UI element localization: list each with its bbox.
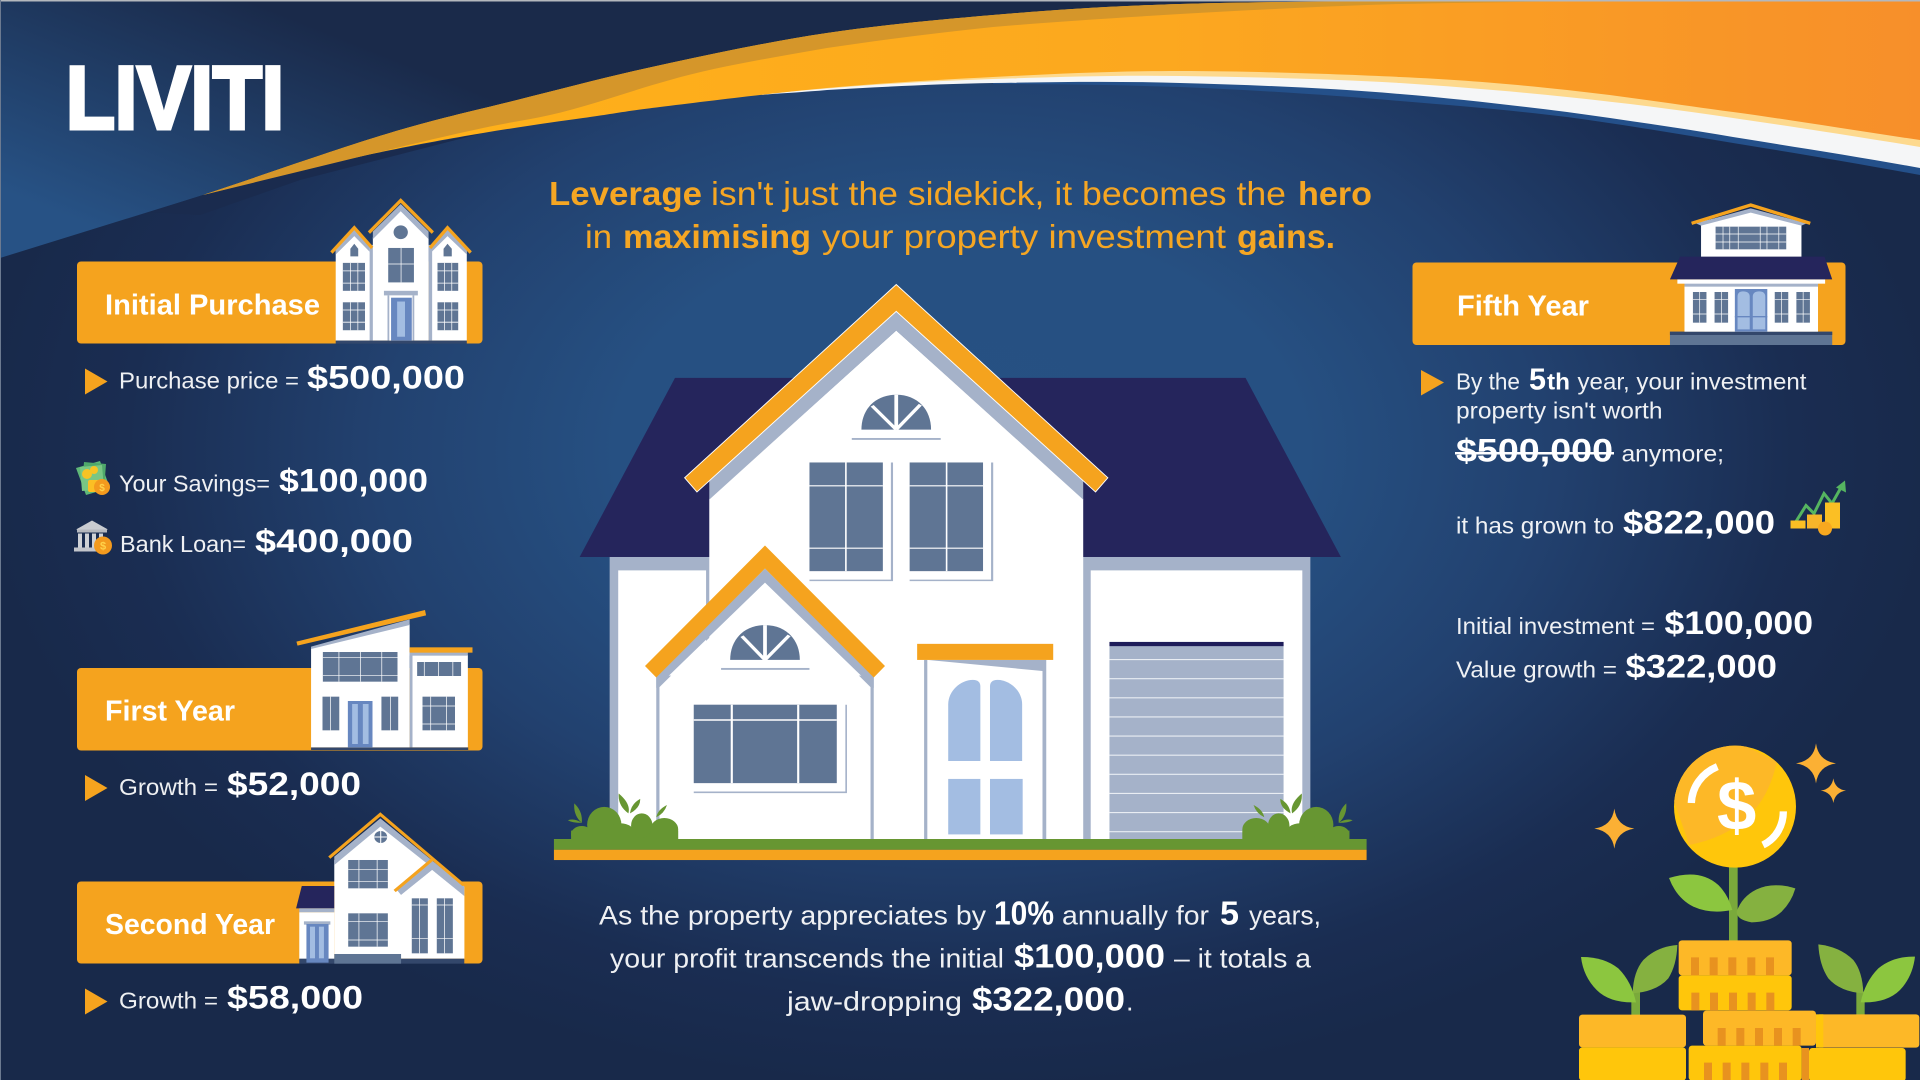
headline: Leverage xyxy=(549,175,702,212)
banner: second year xyxy=(77,882,482,964)
initial investment row: Initial investment = xyxy=(1456,613,1655,639)
headline xyxy=(549,175,1372,255)
icon: savings money: $ xyxy=(99,483,105,494)
panel: initial purchase xyxy=(74,201,482,559)
leaves xyxy=(1581,874,1915,1002)
banner: fifth year xyxy=(1412,262,1846,345)
main gable trim xyxy=(709,311,1083,500)
main gable wall xyxy=(709,330,1083,839)
headline: gains. xyxy=(1237,218,1335,255)
text: grown value xyxy=(1456,504,1775,540)
left bush xyxy=(568,793,678,845)
value growth row xyxy=(1456,648,1777,684)
heading: initial purchase: Initial Purchase xyxy=(105,290,320,322)
headline: in xyxy=(585,218,612,255)
savings row: Your Savings= xyxy=(119,470,270,496)
text: 5th year worth: $500,000 xyxy=(1456,432,1613,468)
text: grown value: $822,000 xyxy=(1623,504,1775,540)
bank loan row: $400,000 xyxy=(255,523,413,559)
text: 5th year worth: year, your investment xyxy=(1578,368,1807,394)
headline: maximising xyxy=(623,218,811,255)
heading: second year: Second Year xyxy=(105,909,275,941)
summary text: annually for xyxy=(1062,900,1209,930)
purchase price row xyxy=(119,360,465,396)
side walls xyxy=(610,557,1310,839)
icon: bank: $ xyxy=(100,540,106,552)
main gable orange roof xyxy=(685,285,1108,492)
banner: initial purchase xyxy=(77,262,482,344)
upper window left xyxy=(809,462,893,581)
summary text: $322,000 xyxy=(972,980,1125,1018)
summary text: years, xyxy=(1249,900,1321,930)
back roof xyxy=(580,378,1341,557)
icon: gabled house with wing xyxy=(296,814,464,964)
summary text: $100,000 xyxy=(1014,938,1165,974)
banner: first year xyxy=(77,668,482,750)
summary text: 5 xyxy=(1220,894,1239,932)
shadow below swoosh tip xyxy=(150,133,483,215)
savings row: $100,000 xyxy=(279,462,428,498)
text: 5th year worth: property isn't worth xyxy=(1456,398,1662,424)
summary text: – it totals a xyxy=(1174,944,1312,974)
icon: modern house xyxy=(296,610,472,750)
coin flower xyxy=(1674,746,1796,868)
growth row year two: $58,000 xyxy=(227,980,363,1016)
heading: fifth year: Fifth Year xyxy=(1457,290,1589,322)
summary text: your profit transcends the initial xyxy=(610,944,1004,974)
top left blue corner xyxy=(0,0,1400,258)
value growth row: Value growth = xyxy=(1456,656,1617,682)
front gable xyxy=(645,546,885,839)
growth row year one: Growth = xyxy=(119,774,218,800)
upper arched window xyxy=(852,395,941,440)
headline: isn't just the sidekick, it becomes the xyxy=(711,175,1286,212)
illustration: money plant with coins xyxy=(1579,737,1919,1080)
panel: fifth year xyxy=(1412,205,1846,684)
icon: bungalow house xyxy=(1670,205,1832,345)
initial investment row xyxy=(1456,605,1813,641)
summary text: jaw-dropping xyxy=(786,986,962,1016)
arrow: growth year one xyxy=(85,775,108,801)
summary text xyxy=(599,894,1321,1018)
text: 5th year worth: th xyxy=(1547,368,1570,394)
text: grown value: it has grown to xyxy=(1456,512,1614,538)
growth row year two: Growth = xyxy=(119,988,218,1014)
text: 5th year worth: By the xyxy=(1456,368,1520,394)
upper window right xyxy=(910,462,993,581)
headline: your property investment xyxy=(822,218,1226,255)
icon: three gabled house xyxy=(331,201,471,344)
icon: savings money xyxy=(76,461,110,495)
front window xyxy=(694,705,847,793)
summary text: As the property appreciates by xyxy=(599,900,987,930)
growth row year two xyxy=(119,980,363,1016)
coin stacks xyxy=(1579,940,1919,1080)
text: 5th year worth xyxy=(1455,362,1807,468)
porch and door xyxy=(917,644,1053,839)
heading: first year: First Year xyxy=(105,696,235,728)
bank loan row: Bank Loan= xyxy=(120,531,246,557)
arrow: fifth year xyxy=(1421,370,1444,396)
stems xyxy=(1631,863,1865,1017)
arrow: purchase price xyxy=(85,368,108,394)
summary text: . xyxy=(1126,986,1134,1016)
illustration: main house xyxy=(554,285,1367,860)
logo: LIVITI xyxy=(66,48,284,148)
value growth row: $322,000 xyxy=(1626,648,1777,684)
panel: second year xyxy=(77,814,482,1016)
purchase price row: Purchase price = xyxy=(119,368,299,394)
bank loan row xyxy=(120,523,413,559)
arrow: growth year two xyxy=(85,988,108,1014)
coin flower: $ xyxy=(1717,766,1756,845)
icon: bank xyxy=(74,520,112,554)
top swoosh xyxy=(203,2,1920,195)
savings row xyxy=(119,462,428,498)
headline: hero xyxy=(1298,175,1372,212)
growth row year one xyxy=(119,766,361,802)
right bush xyxy=(1242,793,1353,845)
growth row year one: $52,000 xyxy=(227,766,361,802)
garage door xyxy=(1109,642,1284,839)
summary text: 10% xyxy=(994,894,1054,932)
purchase price row: $500,000 xyxy=(307,360,465,396)
front arched window xyxy=(721,625,809,670)
icon: growth chart with coins xyxy=(1790,480,1846,536)
text: 5th year worth: 5 xyxy=(1529,362,1546,396)
sparkles xyxy=(1594,743,1846,849)
text: 5th year worth: anymore; xyxy=(1622,440,1724,466)
initial investment row: $100,000 xyxy=(1664,605,1813,641)
panel: first year xyxy=(77,610,482,802)
ground strip xyxy=(554,839,1367,860)
